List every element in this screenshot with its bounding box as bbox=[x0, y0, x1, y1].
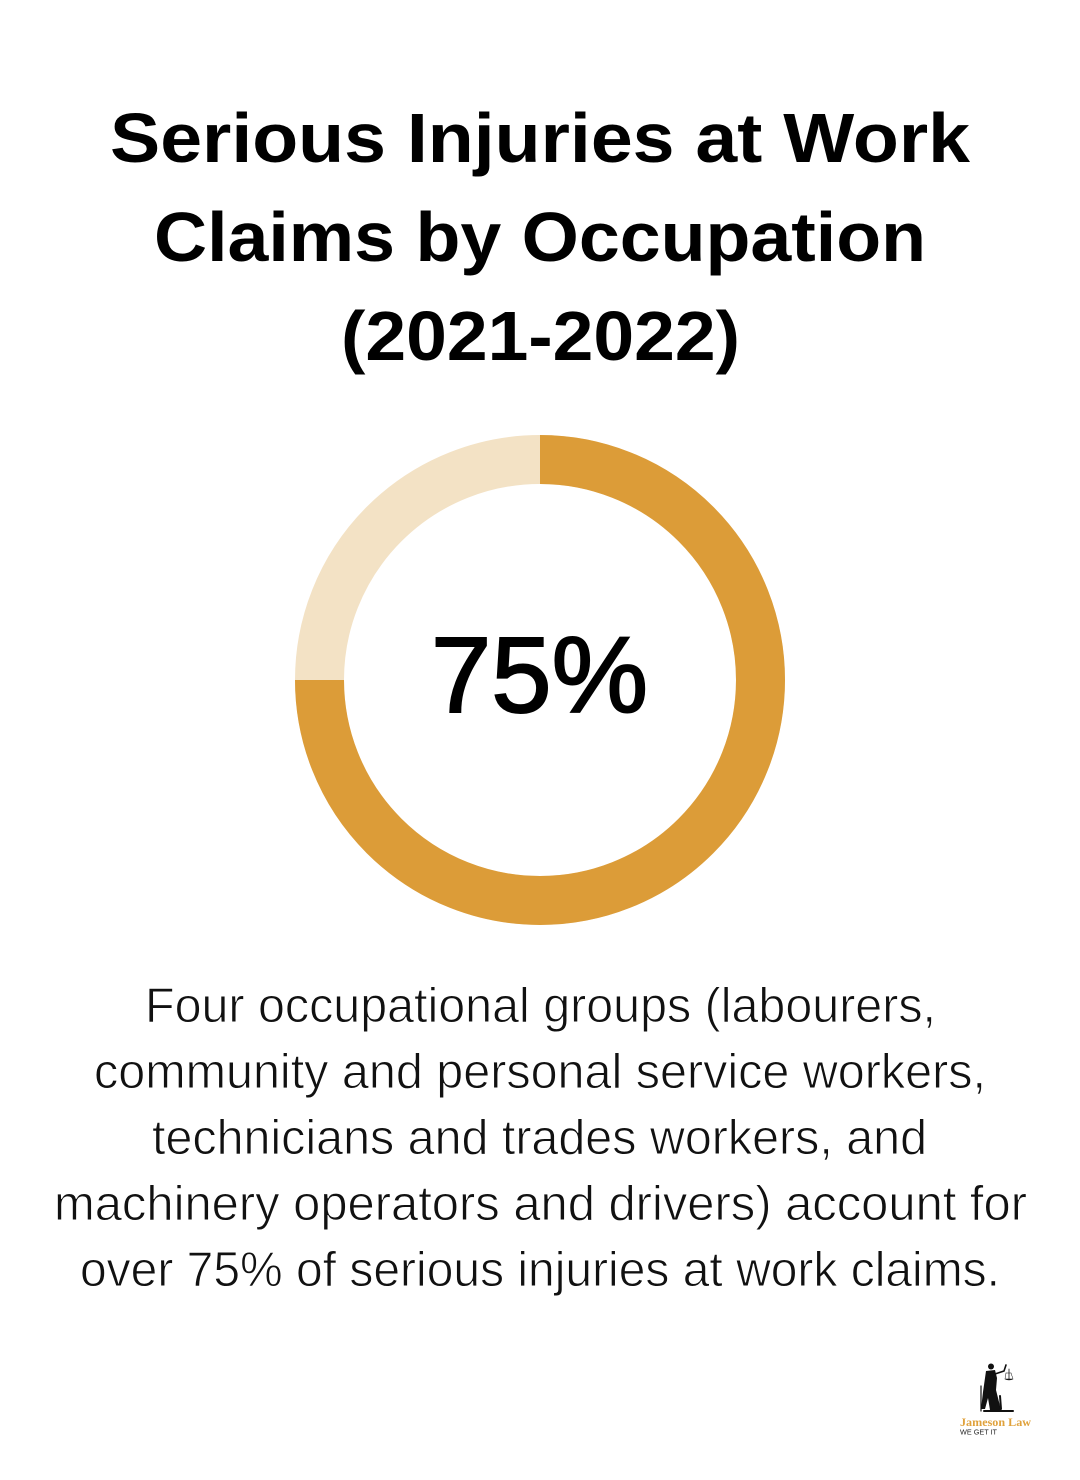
title bbox=[110, 99, 970, 375]
title: Claims by Occupation bbox=[154, 198, 926, 276]
donut centre value: 75% bbox=[431, 614, 648, 735]
description text: Four occupational groups (labourers, bbox=[145, 979, 936, 1033]
title: Serious Injuries at Work bbox=[110, 99, 970, 177]
description text: machinery operators and drivers) account for bbox=[54, 1177, 1027, 1231]
donut 75% segment bbox=[320, 460, 760, 901]
title: (2021-2022) bbox=[341, 297, 740, 375]
donut remainder segment bbox=[320, 460, 760, 900]
logo: Jameson Law bbox=[960, 1364, 1032, 1436]
description text: technicians and trades workers, and bbox=[152, 1111, 927, 1165]
logo name: Jameson Law bbox=[960, 1417, 1032, 1429]
description text: community and personal service workers, bbox=[94, 1045, 986, 1099]
donut chart: 75% bbox=[320, 460, 760, 901]
description text: over 75% of serious injuries at work claims. bbox=[80, 1243, 1000, 1297]
logo tagline: WE GET IT bbox=[960, 1430, 998, 1436]
icon: lady justice figure bbox=[981, 1364, 1013, 1411]
description text bbox=[54, 979, 1027, 1297]
